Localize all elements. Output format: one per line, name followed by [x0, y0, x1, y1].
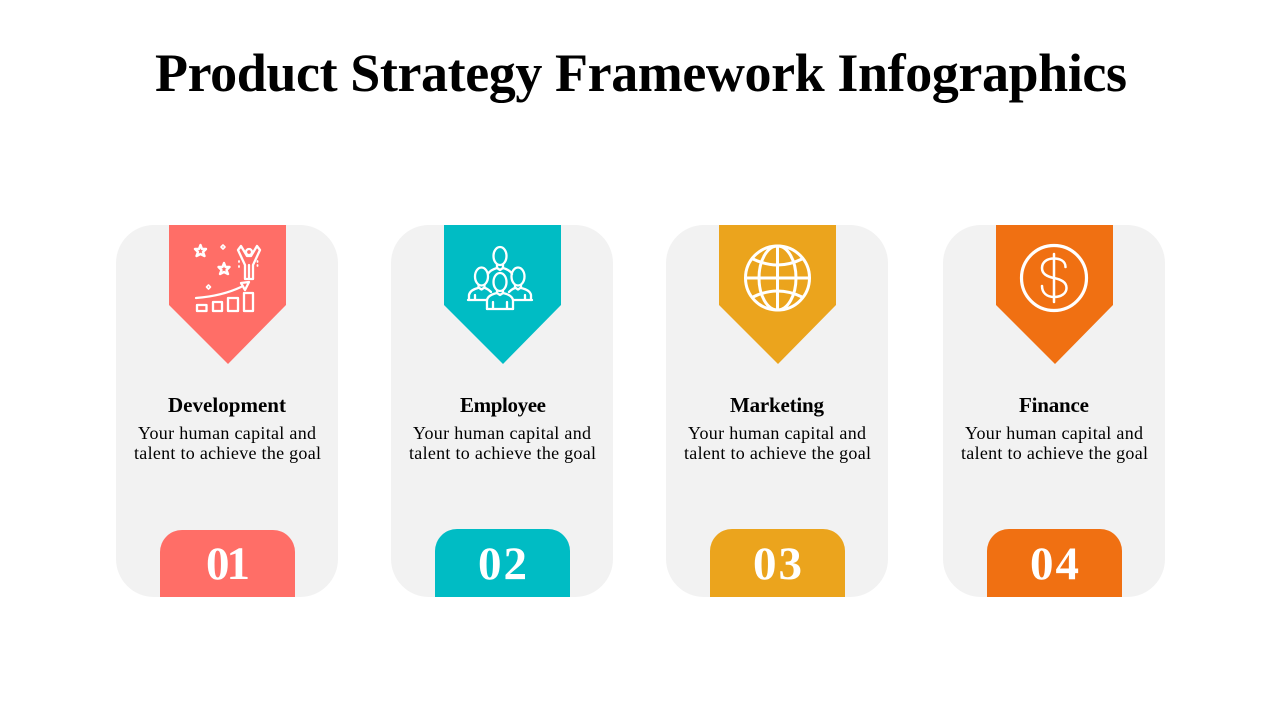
icon: team of people — [468, 247, 532, 309]
number tab: 02 — [435, 529, 570, 597]
text: development description — [134, 423, 321, 463]
number tab: 04 — [987, 529, 1122, 597]
number tab: 03: 03 — [753, 538, 802, 590]
pennant: finance — [996, 225, 1113, 364]
text: development description: Your human capital and — [138, 423, 316, 443]
number tab: 01: 01 — [206, 538, 250, 590]
text: employee description — [409, 423, 596, 463]
text: marketing description — [684, 423, 871, 463]
title: Product Strategy Framework Infographics — [155, 43, 1127, 103]
panel: marketing — [666, 225, 888, 597]
panel: employee — [391, 225, 613, 597]
heading: marketing: Marketing — [730, 393, 824, 417]
panel: development — [116, 225, 338, 597]
icon: globe — [746, 246, 810, 310]
number tab: 03 — [710, 529, 845, 597]
pennant: development — [169, 225, 286, 364]
heading: finance: Finance — [1019, 393, 1089, 417]
pennant: employee — [444, 225, 561, 364]
heading: employee: Employee — [460, 393, 546, 417]
number tab: 02: 02 — [478, 538, 527, 590]
text: employee description: Your human capital and — [413, 423, 591, 443]
text: finance description: Your human capital and — [965, 423, 1143, 443]
number tab: 01 — [160, 530, 295, 597]
text: development description: talent to achieve the goal — [134, 443, 321, 463]
text: employee description: talent to achieve the goal — [409, 443, 596, 463]
text: finance description — [961, 423, 1148, 463]
pennant: marketing — [719, 225, 836, 364]
icon: achievement and growth chart — [195, 245, 260, 311]
panel: finance — [943, 225, 1165, 597]
text: finance description: talent to achieve the goal — [961, 443, 1148, 463]
heading: development: Development — [168, 393, 286, 417]
number tab: 04: 04 — [1030, 538, 1079, 590]
text: marketing description: talent to achieve the goal — [684, 443, 871, 463]
text: marketing description: Your human capital and — [688, 423, 866, 443]
icon: dollar coin — [1022, 246, 1086, 310]
